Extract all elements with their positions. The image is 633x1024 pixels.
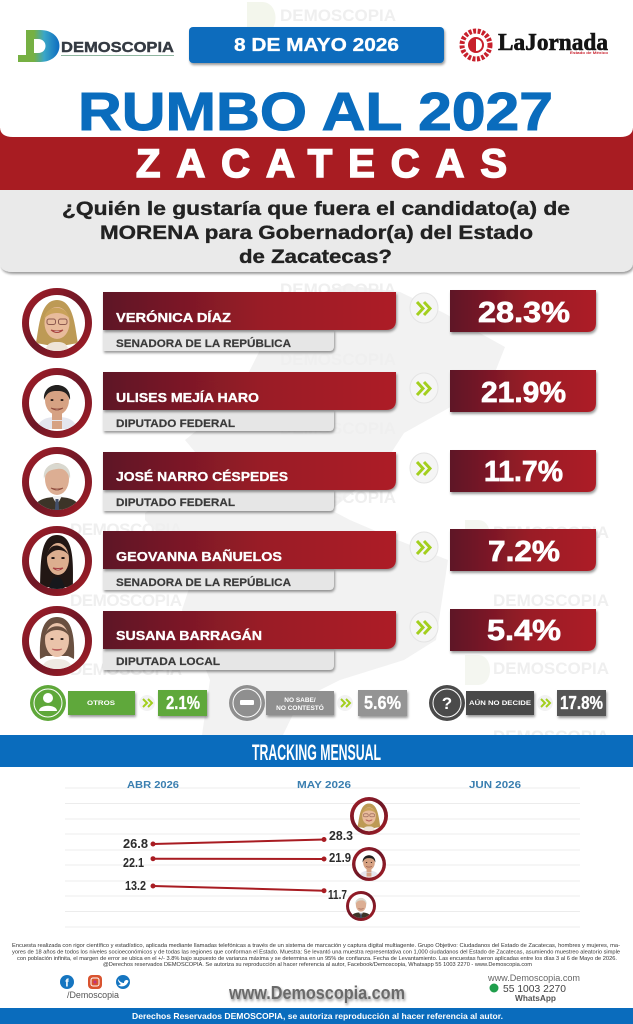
name bar [103, 452, 396, 490]
others: No sabe / No contestó [229, 685, 407, 721]
role bar: DIPUTADO FEDERAL [116, 418, 235, 430]
portrait [22, 288, 92, 358]
arrow [410, 612, 438, 642]
name bar [103, 611, 396, 649]
value labels: 13.2 [125, 878, 146, 893]
map of Zacatecas watermark [145, 285, 505, 735]
tracking header band: TRACKING MENSUAL [252, 740, 381, 765]
arrow [410, 373, 438, 403]
value: 11.7% [484, 456, 563, 488]
portrait [22, 447, 92, 517]
header logo: Demoscopia [18, 30, 174, 62]
red band: Zacatecas: ZACATECAS [136, 142, 507, 186]
others: Aún no decide [429, 685, 606, 721]
value labels [123, 828, 353, 902]
value: 28.3% [478, 297, 570, 329]
methodology note [12, 943, 620, 968]
contact block: 55 1003 2270 [503, 983, 566, 995]
candidate row: Susana Barragán [22, 606, 596, 676]
contact block: www.Demoscopia.com [487, 973, 580, 983]
footer band [0, 1008, 633, 1024]
watermarks: DEMOSCOPIA [493, 523, 609, 542]
watermarks [70, 2, 609, 746]
question text: de Zacatecas? [239, 247, 392, 268]
footer band: Derechos Reservados DEMOSCOPIA, se autoriza reproducción al hacer referencia al autor. [132, 1011, 503, 1021]
icon: instagram [88, 975, 102, 989]
value labels: 26.8 [123, 836, 148, 851]
watermarks: DEMOSCOPIA [70, 591, 182, 610]
others: Otros: OTROS [87, 700, 116, 707]
role bar [103, 410, 334, 431]
date box: 8 DE MAYO 2026 [234, 35, 399, 55]
watermarks: DEMOSCOPIA [280, 488, 396, 507]
icon: question mark: ? [442, 694, 452, 713]
value labels: 28.3 [329, 828, 353, 843]
others: No sabe / No contestó: 5.6% [364, 693, 401, 713]
icon: twitter [116, 975, 130, 989]
title panel: RUMBO AL 2027 [78, 82, 553, 142]
month labels [127, 779, 521, 791]
others: No sabe / No contestó: NO CONTESTÓ [276, 703, 324, 712]
name bar [103, 292, 396, 330]
header logo: La Jornada [462, 30, 609, 59]
role bar: DIPUTADO FEDERAL [116, 497, 235, 509]
role bar: SENADORA DE LA REPÚBLICA [116, 337, 291, 350]
value: 7.2% [488, 536, 560, 568]
value: 21.9% [481, 377, 566, 409]
month labels: MAY 2026 [297, 779, 351, 791]
name bar: ULISES MEJÍA HARO [116, 390, 259, 405]
candidate row: José Narro Céspedes [22, 447, 596, 517]
candidate row: Verónica Díaz [22, 288, 596, 358]
role bar [103, 490, 334, 511]
watermarks: DEMOSCOPIA [70, 520, 182, 539]
value labels: 22.1 [123, 855, 144, 870]
website: www.Demoscopia.com [228, 983, 405, 1003]
portrait [22, 526, 92, 596]
social icons [60, 975, 130, 1000]
portrait: Ulises Mejía Haro [352, 847, 386, 881]
others: Aún no decide: AÚN NO DECIDE [469, 698, 532, 707]
watermarks: DEMOSCOPIA [493, 659, 609, 678]
value [450, 370, 596, 412]
methodology note: @Derechos reservados DEMOSCOPIA. Se autoriza su reproducción al hacer referencia al autor, Facebook/Demoscopia, Whatsapp 55 1003 2270 - www.Demoscopia.com [103, 962, 532, 968]
watermarks: DEMOSCOPIA [280, 6, 396, 25]
icon: person [30, 685, 66, 721]
value labels: 21.9 [329, 850, 351, 865]
value [450, 609, 596, 651]
header logo: Demoscopia: DEMOSCOPIA [61, 39, 174, 56]
red band: Zacatecas [0, 128, 633, 190]
question text [62, 199, 570, 268]
contact block [487, 973, 580, 1003]
icon: minus [229, 685, 265, 721]
role bar: SENADORA DE LA REPÚBLICA [116, 576, 291, 589]
methodology note: Encuesta realizada con rigor científico y estadístico, aplicada mediante llamadas telefónicas a través de un sistema de marcación y captura digital multiagente. Grupo Objetivo: Ciudadanos del Estado de Zacatecas, hombres y mujeres, ma- [12, 943, 620, 949]
others: Otros: 2.1% [166, 693, 200, 713]
value [450, 290, 596, 332]
portrait: Verónica Díaz [350, 797, 388, 835]
role bar [103, 330, 334, 351]
name bar: VERÓNICA DÍAZ [116, 310, 231, 325]
icon: question mark [429, 685, 465, 721]
value labels: 11.7 [328, 887, 347, 902]
name bar [103, 372, 396, 410]
date box [189, 27, 444, 63]
series lines [152, 838, 326, 892]
question text: ¿Quién le gustaría que fuera el candidato(a) de [62, 199, 570, 220]
arrow [410, 293, 438, 323]
panel: question [0, 186, 633, 272]
watermarks: DEMOSCOPIA [280, 419, 396, 438]
name bar [103, 531, 396, 569]
line chart: monthly tracking [65, 779, 580, 927]
contact block: WhatsApp [515, 994, 556, 1003]
portrait [22, 606, 92, 676]
value [450, 450, 596, 492]
social icons: /Demoscopia [67, 990, 119, 1000]
watermarks: DEMOSCOPIA [70, 660, 182, 679]
watermarks: DEMOSCOPIA [280, 350, 396, 369]
candidate row: Ulises Mejía Haro [22, 368, 596, 438]
role bar [103, 649, 334, 670]
watermarks: DEMOSCOPIA [493, 727, 609, 746]
icon: whatsapp [490, 984, 498, 992]
arrow [410, 532, 438, 562]
arrow [410, 453, 438, 483]
portrait: José Narro Céspedes [346, 891, 376, 921]
icon: facebook: f [65, 978, 69, 990]
name bar: SUSANA BARRAGÁN [116, 628, 262, 643]
candidate row: Geovanna Bañuelos [22, 526, 596, 596]
methodology note: con población infinita, el margen de error se ubica en el +/- 3.8% bajo supuesto de varianza máxima y se determina en un 95% de confianza. Fecha de Levantamiento. Las encuestas fueron aplicadas entre los días 3 al 6 de Mayo de 2026. [17, 956, 617, 962]
header logo: La Jornada: LaJornada [498, 30, 608, 56]
methodology note: yores de 18 años de todos los niveles socioeconómicos y de todas las regiones que conforman el Estado. Muestra: Se levantó una muestra representativa con 1,000 ciudadanos del Estado de Zacatecas, asumiendo muestreo aleatorio simple [12, 950, 620, 956]
name bar: JOSÉ NARRO CÉSPEDES [116, 469, 288, 484]
watermarks: DEMOSCOPIA [493, 591, 609, 610]
title panel [0, 70, 633, 142]
others: No sabe / No contestó: NO SABE/ [284, 697, 316, 704]
watermarks: DEMOSCOPIA [280, 280, 396, 299]
role bar [103, 569, 334, 590]
portrait [22, 368, 92, 438]
month labels: ABR 2026 [127, 779, 179, 791]
question text: MORENA para Gobernador(a) del Estado [100, 223, 533, 244]
month labels: JUN 2026 [469, 779, 521, 791]
value [450, 529, 596, 571]
others: Aún no decide: 17.8% [560, 693, 603, 713]
tracking header band [0, 735, 633, 767]
value: 5.4% [487, 615, 561, 647]
others: Otros [30, 685, 207, 721]
name bar: GEOVANNA BAÑUELOS [116, 549, 282, 564]
header logo: La Jornada: Estado de México [570, 50, 609, 55]
role bar: DIPUTADA LOCAL [116, 656, 220, 668]
